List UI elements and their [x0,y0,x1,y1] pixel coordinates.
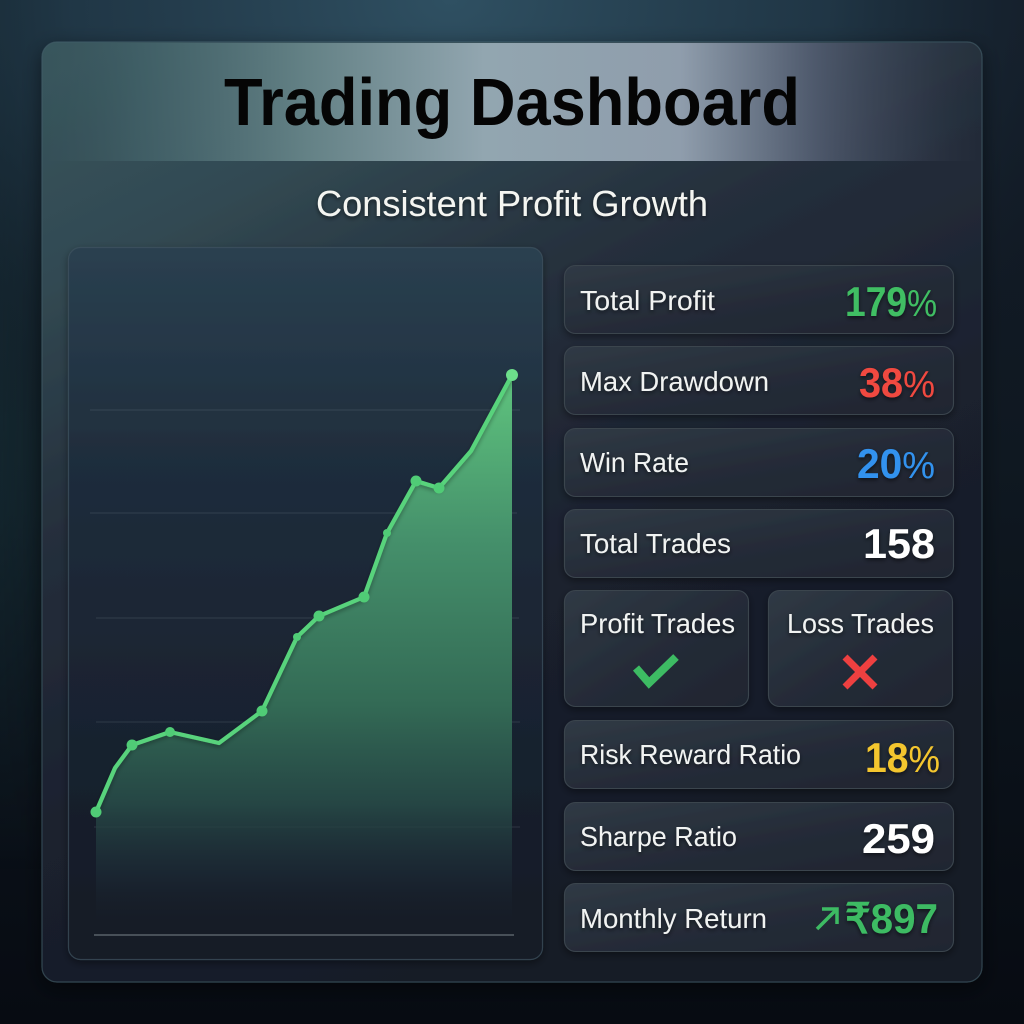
card: win rate [564,428,954,496]
card: total trades [564,510,954,578]
card: risk reward ratio: 18% [865,734,940,781]
card: total trades: 158 [863,520,935,567]
chart baseline [94,934,514,936]
card: sharpe ratio: Sharpe Ratio [580,821,737,852]
card: sharpe ratio: 259 [862,815,935,862]
card: total profit: Total Profit [580,285,715,316]
card: max drawdown: Max Drawdown [580,366,769,397]
card: total profit: 179% [845,278,937,325]
card: win rate: Win Rate [580,447,689,478]
panel: equity chart [68,248,542,960]
card: profit trades [564,590,748,706]
card: risk reward ratio: Risk Reward Ratio [580,739,801,770]
chart area fill [96,375,512,925]
icon: cross mark [845,657,875,687]
card: monthly return: Monthly Return [580,903,767,934]
card: max drawdown: 38% [859,359,935,406]
card: monthly return: ₹897 [845,895,938,942]
chart grid lines [90,410,520,827]
card: sharpe ratio [564,802,954,870]
card: profit trades: Profit Trades [580,608,735,639]
card: total trades: Total Trades [580,528,731,559]
icon: up arrow [817,909,837,929]
chart data points [90,369,518,818]
card: monthly return [564,884,954,952]
header band [43,43,981,161]
card: loss trades: Loss Trades [787,608,934,639]
card: risk reward ratio [564,720,954,788]
chart line [96,375,512,812]
icon: check mark [636,657,676,683]
title: Trading Dashboard [224,65,800,140]
card: loss trades [768,590,952,706]
background [0,0,1024,732]
card: total profit [564,266,954,334]
subtitle: Consistent Profit Growth [316,183,708,224]
card: max drawdown [564,346,954,414]
card: win rate: 20% [857,440,935,487]
